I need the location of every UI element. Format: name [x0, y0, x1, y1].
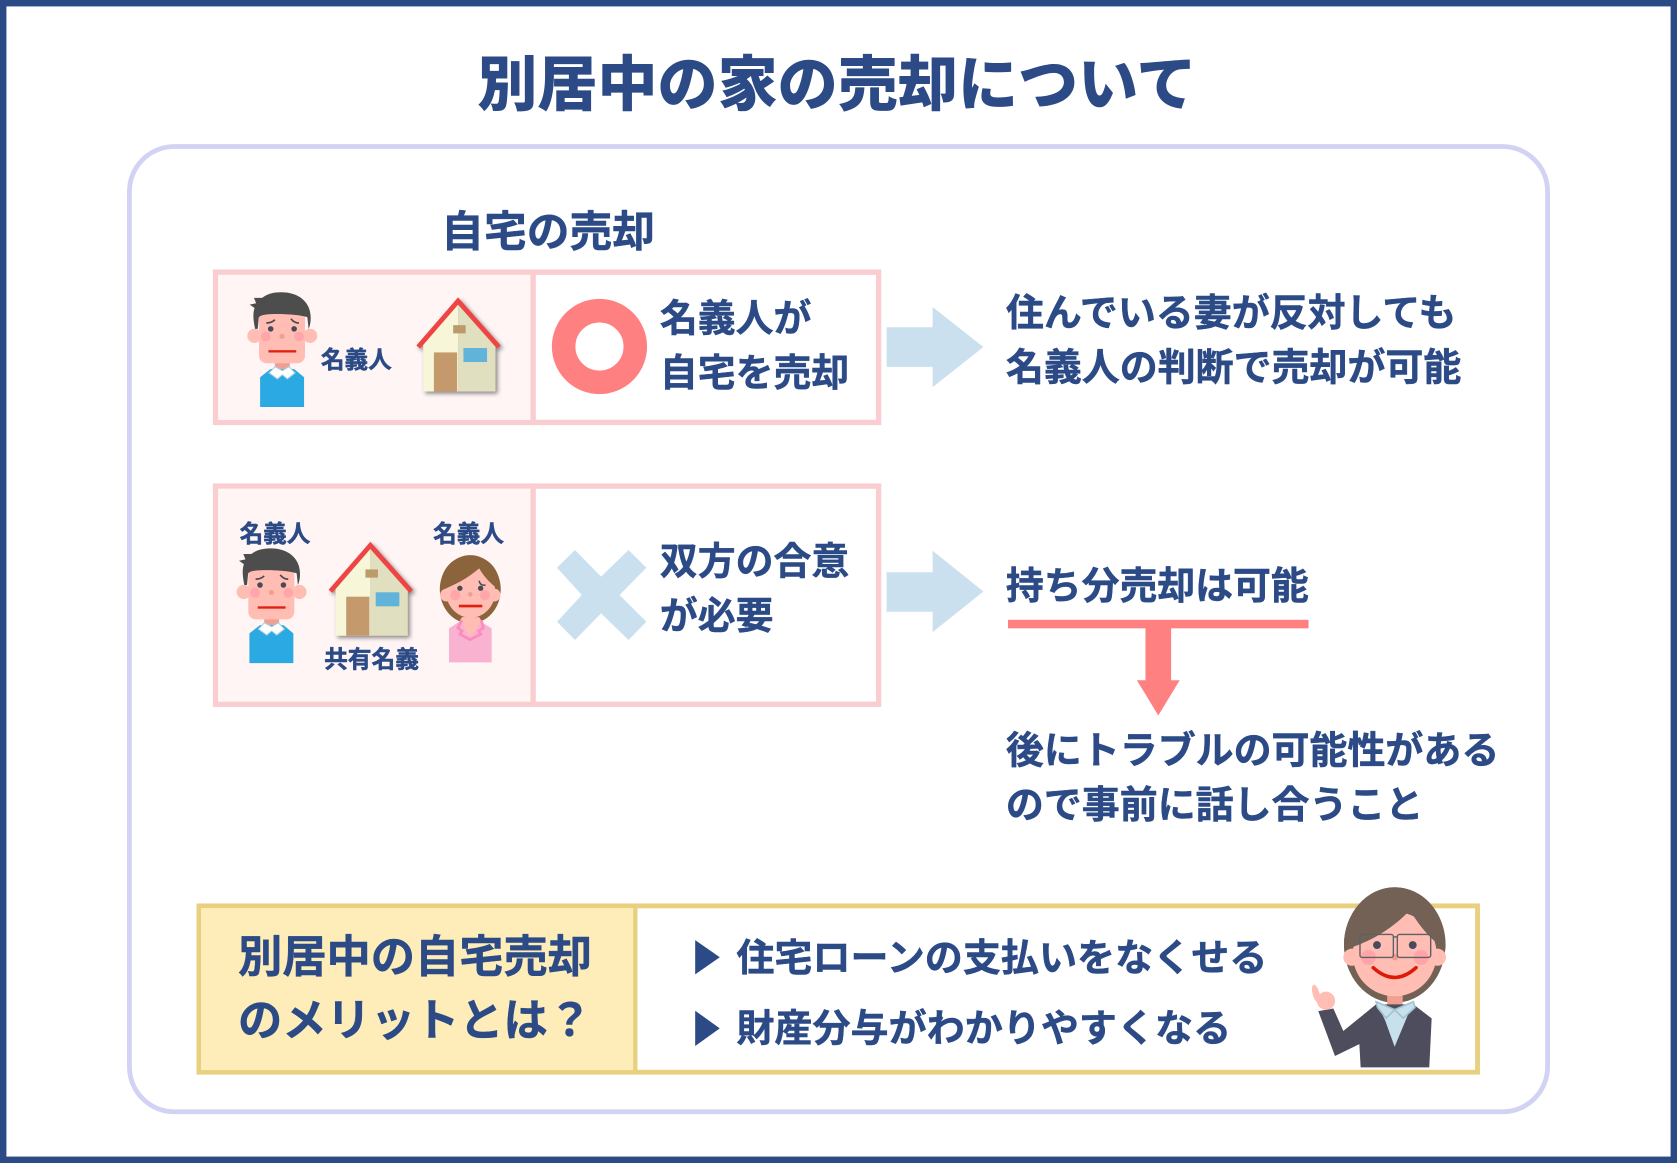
text: trouble warning: 後にトラブルの可能性がある: [1006, 730, 1499, 773]
text: trouble warning: ので事前に話し合うこと: [1006, 785, 1423, 827]
row 1 divider: [530, 272, 536, 424]
text: trouble warning: [1006, 730, 1499, 827]
bullet triangle 1: [695, 940, 720, 974]
icon: man: [247, 292, 317, 407]
row 1 left cell background: [218, 275, 530, 420]
icon: house: [418, 301, 499, 391]
text: mutual agreement needed: 双方の合意: [660, 541, 849, 583]
arrow: row 1: [887, 307, 983, 387]
text: mutual agreement needed: が必要: [660, 596, 773, 638]
icon: woman: [440, 555, 501, 662]
icon: presenter woman: [1310, 887, 1446, 1067]
icon: man: [237, 548, 307, 663]
row 2 left cell background: [218, 489, 530, 702]
merit item 1: 住宅ローンの支払いをなくせる: [736, 938, 1267, 980]
label: owner left: 名義人: [240, 521, 311, 548]
arrow: row 2: [887, 551, 983, 632]
label: owner right: 名義人: [433, 521, 504, 548]
text: row 1 result: 名義人の判断で売却が可能: [1006, 348, 1461, 390]
merit heading: [238, 933, 592, 1045]
underline: [1008, 620, 1309, 628]
icon: circle mark: [564, 311, 635, 382]
row 2 divider: [530, 486, 536, 706]
title: 別居中の家の売却について: [477, 51, 1197, 118]
text: mutual agreement needed: [660, 541, 849, 638]
label: owner: 名義人: [321, 347, 392, 374]
text: partial sale possible: 持ち分売却は可能: [1006, 566, 1309, 608]
text: owner sells home: [660, 299, 849, 395]
merit box: [199, 905, 1478, 1074]
text: row 1 result: 住んでいる妻が反対しても: [1006, 293, 1456, 335]
merit heading: のメリットとは？: [238, 996, 592, 1045]
row 1: sole owner comparison box: [216, 272, 879, 424]
merit heading: 別居中の自宅売却: [238, 933, 592, 982]
icon: house: [330, 545, 411, 636]
row 2: joint ownership comparison box: [216, 486, 879, 706]
merit item 2: 財産分与がわかりやすくなる: [736, 1009, 1231, 1051]
merit box divider: [633, 905, 637, 1074]
heading: home sale: 自宅の売却: [441, 209, 655, 257]
label: joint ownership: 共有名義: [324, 646, 419, 673]
merit box left cell: [201, 908, 634, 1070]
text: row 1 result: [1006, 293, 1461, 390]
bullet triangle 2: [695, 1011, 720, 1046]
icon: cross mark: [557, 550, 646, 640]
merit box frame: [199, 906, 1478, 1072]
arrow: down: [1137, 628, 1180, 716]
text: owner sells home: 自宅を売却: [660, 353, 849, 395]
row 2 frame: [216, 486, 879, 704]
row 1 frame: [216, 272, 879, 422]
text: owner sells home: 名義人が: [660, 299, 811, 341]
main rounded panel: [129, 147, 1548, 1112]
